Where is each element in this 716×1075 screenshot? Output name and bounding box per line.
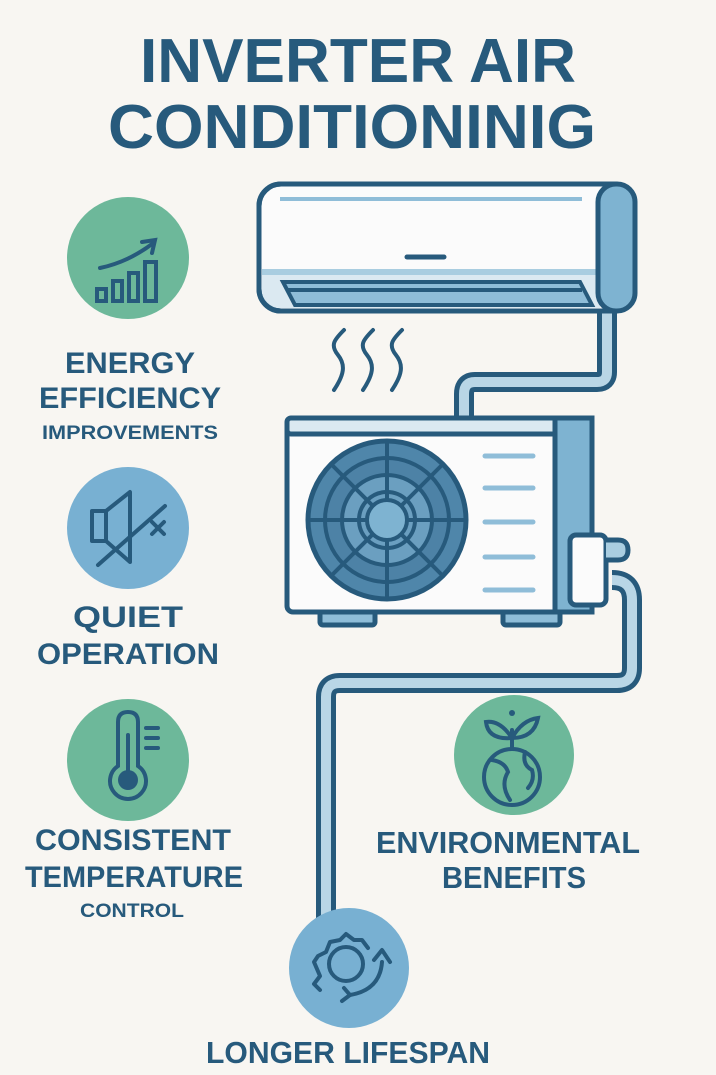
outdoor unit xyxy=(287,418,628,625)
title: INVERTER AIR xyxy=(140,27,576,96)
panel: longer lifespan xyxy=(206,908,490,1070)
panel: consistent temperature: CONSISTENT xyxy=(35,824,231,857)
panel: quiet operation: QUIET xyxy=(73,601,183,634)
icon: muted speaker xyxy=(67,467,189,589)
panel: energy efficiency: ENERGY xyxy=(65,347,195,380)
fan xyxy=(308,441,466,599)
panel: consistent temperature: TEMPERATURE xyxy=(25,861,243,894)
icon: airflow waves xyxy=(334,330,402,390)
title: CONDITIONINIG xyxy=(108,93,596,162)
icon: gear with cycle arrow xyxy=(289,908,409,1028)
panel: energy efficiency: IMPROVEMENTS xyxy=(42,423,218,444)
panel: environmental benefits: ENVIRONMENTAL xyxy=(376,825,640,860)
title xyxy=(108,27,596,162)
panel: environmental benefits xyxy=(376,695,640,895)
panel: energy efficiency xyxy=(39,197,221,444)
panel: energy efficiency: EFFICIENCY xyxy=(39,382,221,415)
icon: globe with leaves xyxy=(454,695,574,815)
panel: quiet operation xyxy=(37,467,219,671)
icon: growth chart xyxy=(67,197,189,319)
panel: consistent temperature: CONTROL xyxy=(80,901,184,922)
pipe: indoor to outdoor xyxy=(464,312,607,418)
indoor unit xyxy=(259,184,635,311)
panel: environmental benefits: BENEFITS xyxy=(442,860,586,895)
panel: consistent temperature xyxy=(25,699,243,922)
panel: quiet operation: OPERATION xyxy=(37,638,219,671)
connector xyxy=(570,535,606,605)
icon: thermometer xyxy=(67,699,189,821)
pipe: outdoor to lifespan xyxy=(326,580,632,925)
panel: longer lifespan: LONGER LIFESPAN xyxy=(206,1035,490,1070)
